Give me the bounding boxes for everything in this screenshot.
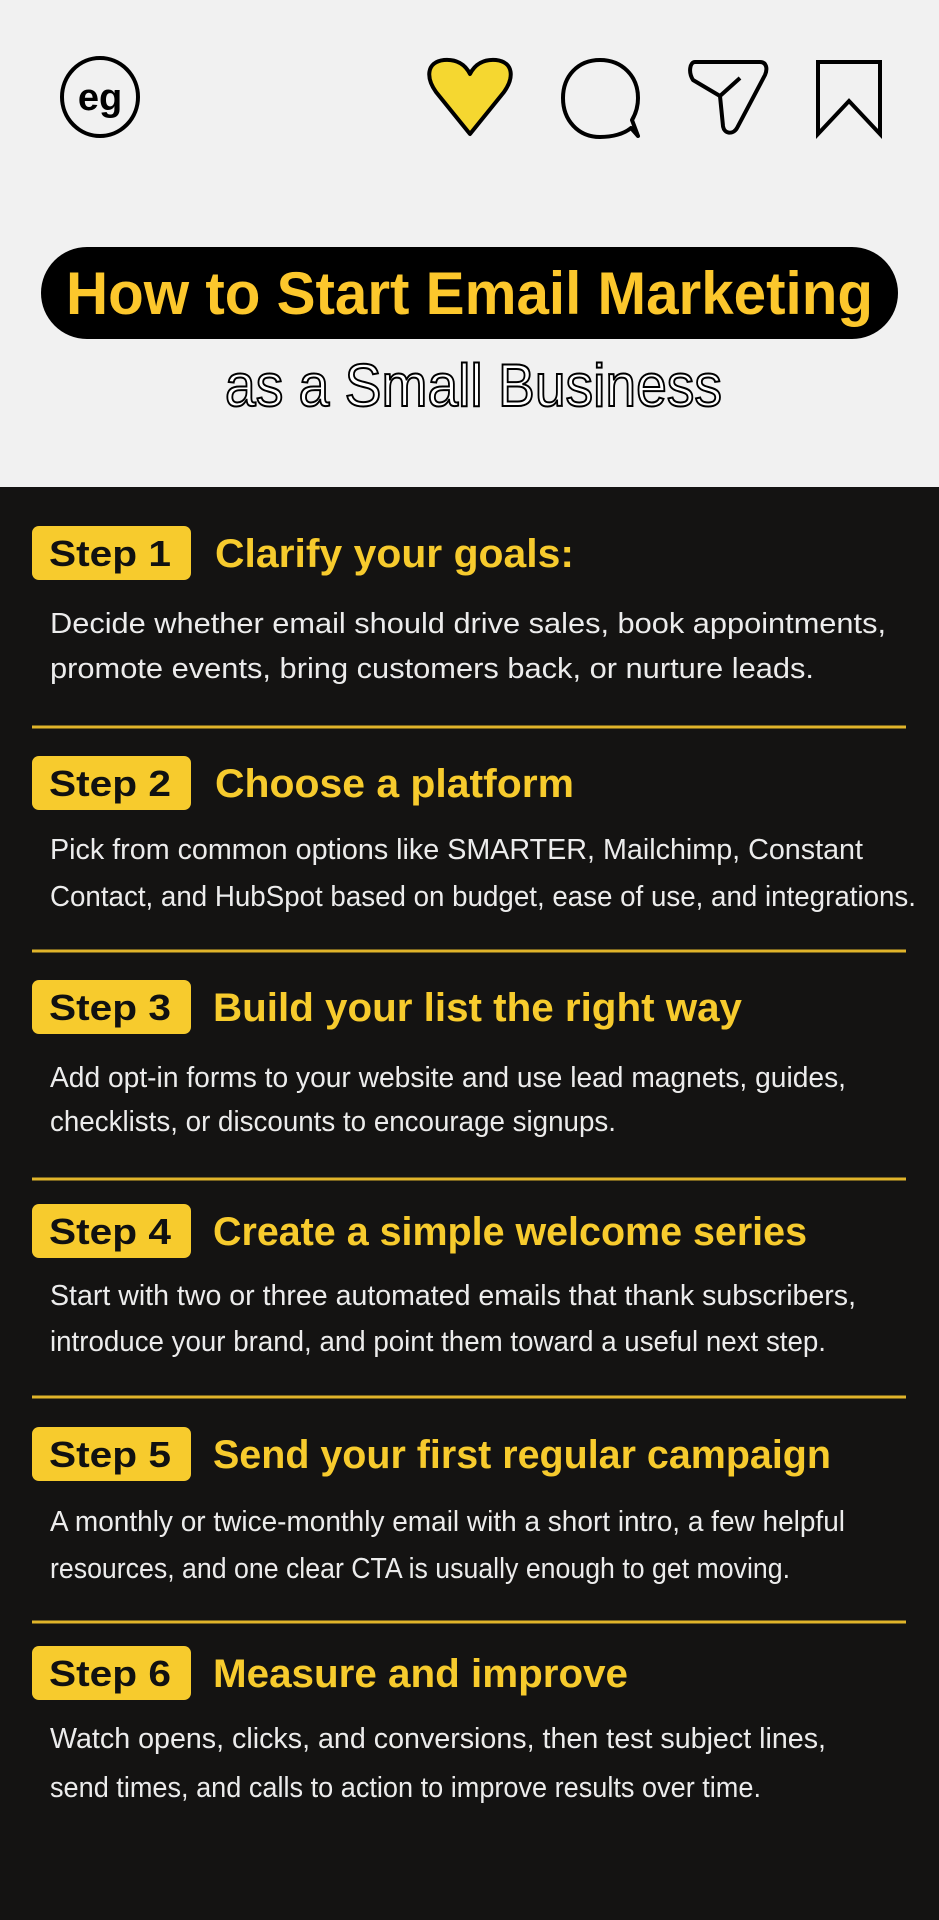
icon: logo bbox=[62, 58, 138, 136]
step 2 bbox=[32, 756, 916, 913]
subtitle: as a Small Business bbox=[225, 352, 722, 419]
step 3: Build your list the right way bbox=[213, 986, 743, 1030]
icon: bookmark bbox=[818, 62, 880, 134]
step 1 bbox=[32, 526, 886, 685]
step 1: promote events, bring customers back, or nurture leads. bbox=[50, 653, 814, 685]
step 4: Create a simple welcome series bbox=[213, 1210, 807, 1254]
step 2: Contact, and HubSpot based on budget, ease of use, and integrations. bbox=[50, 881, 916, 913]
step 6 bbox=[32, 1646, 826, 1804]
step 3 bbox=[32, 980, 846, 1138]
step 6: Watch opens, clicks, and conversions, then test subject lines, bbox=[50, 1723, 826, 1755]
step 4: introduce your brand, and point them toward a useful next step. bbox=[50, 1326, 826, 1358]
icon: logo: eg bbox=[78, 77, 122, 119]
icon: heart bbox=[429, 60, 511, 134]
step 5: resources, and one clear CTA is usually enough to get moving. bbox=[50, 1553, 790, 1585]
step 5: Send your first regular campaign bbox=[213, 1433, 831, 1477]
step 1: Decide whether email should drive sales, book appointments, bbox=[50, 608, 886, 640]
step 3: Step 3 bbox=[49, 987, 171, 1028]
step 6: Measure and improve bbox=[213, 1652, 628, 1696]
step 4: Step 4 bbox=[49, 1211, 171, 1252]
step 4: Start with two or three automated emails that thank subscribers, bbox=[50, 1280, 856, 1312]
step 2: Pick from common options like SMARTER, Mailchimp, Constant bbox=[50, 834, 863, 866]
panel: steps bbox=[0, 487, 939, 1920]
title pill: How to Start Email Marketing bbox=[66, 260, 873, 327]
step 6: send times, and calls to action to improve results over time. bbox=[50, 1772, 761, 1804]
step 3: checklists, or discounts to encourage signups. bbox=[50, 1106, 616, 1138]
step 2: Step 2 bbox=[49, 763, 171, 804]
step 5 bbox=[32, 1427, 845, 1585]
step 5: Step 5 bbox=[49, 1434, 171, 1475]
step 1: Step 1 bbox=[49, 533, 171, 574]
step 3: Add opt-in forms to your website and use lead magnets, guides, bbox=[50, 1062, 846, 1094]
step 4 bbox=[32, 1204, 856, 1358]
icon: send bbox=[690, 62, 766, 133]
step 2: Choose a platform bbox=[215, 762, 574, 806]
step 5: A monthly or twice-monthly email with a short intro, a few helpful bbox=[50, 1506, 845, 1538]
step 1: Clarify your goals: bbox=[215, 532, 574, 576]
step 6: Step 6 bbox=[49, 1653, 171, 1694]
icon: comment bbox=[563, 60, 638, 137]
